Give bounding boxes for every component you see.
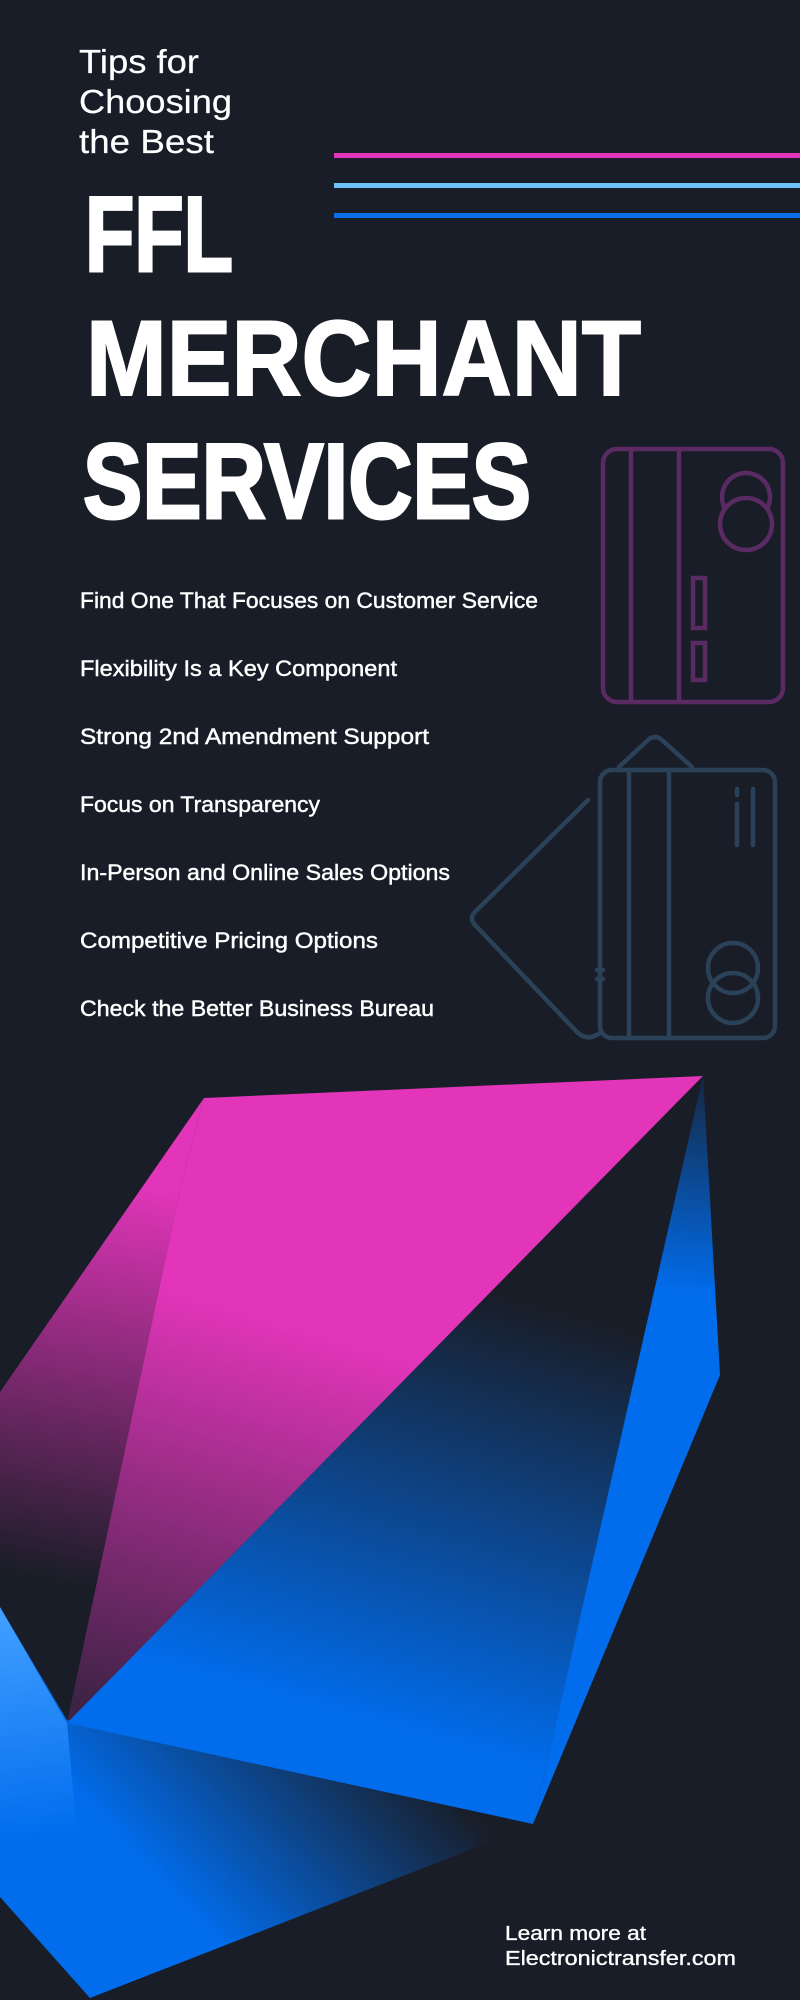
list of tips [80,588,538,1021]
footer: learn more: Electronictransfer.com [505,1948,736,1970]
title: FFL merchant services: MERCHANT [86,298,641,418]
icon: credit card blue with envelope [472,737,775,1038]
list of tips: Find One That Focuses on Customer Service [80,588,538,613]
list of tips: Strong 2nd Amendment Support [80,724,429,749]
title: FFL merchant services: FFL [85,174,233,294]
geometric crystal illustration [0,1076,720,1998]
list of tips: Check the Better Business Bureau [80,996,434,1021]
heading: tips for choosing the best: Choosing [79,83,232,120]
facet: lower blue [0,1607,533,1998]
facet: right blue [533,1076,720,1824]
title: FFL merchant services [83,174,641,541]
title: FFL merchant services: SERVICES [83,421,531,541]
facet: main blue [67,1076,703,1824]
facet: left pink shadow [0,1098,204,1722]
list of tips: Competitive Pricing Options [80,928,378,953]
list of tips: Focus on Transparency [80,792,320,817]
heading: tips for choosing the best [79,43,232,160]
footer: learn more [505,1923,736,1970]
footer: learn more: Learn more at [505,1923,646,1945]
list of tips: In-Person and Online Sales Options [80,860,450,885]
icon: credit card purple [603,449,783,702]
heading: tips for choosing the best: the Best [79,123,214,160]
facet: large pink [67,1076,703,1723]
facet: light blue left [0,1607,77,1850]
list of tips: Flexibility Is a Key Component [80,656,397,681]
accent lines [334,153,800,218]
heading: tips for choosing the best: Tips for [79,43,199,80]
